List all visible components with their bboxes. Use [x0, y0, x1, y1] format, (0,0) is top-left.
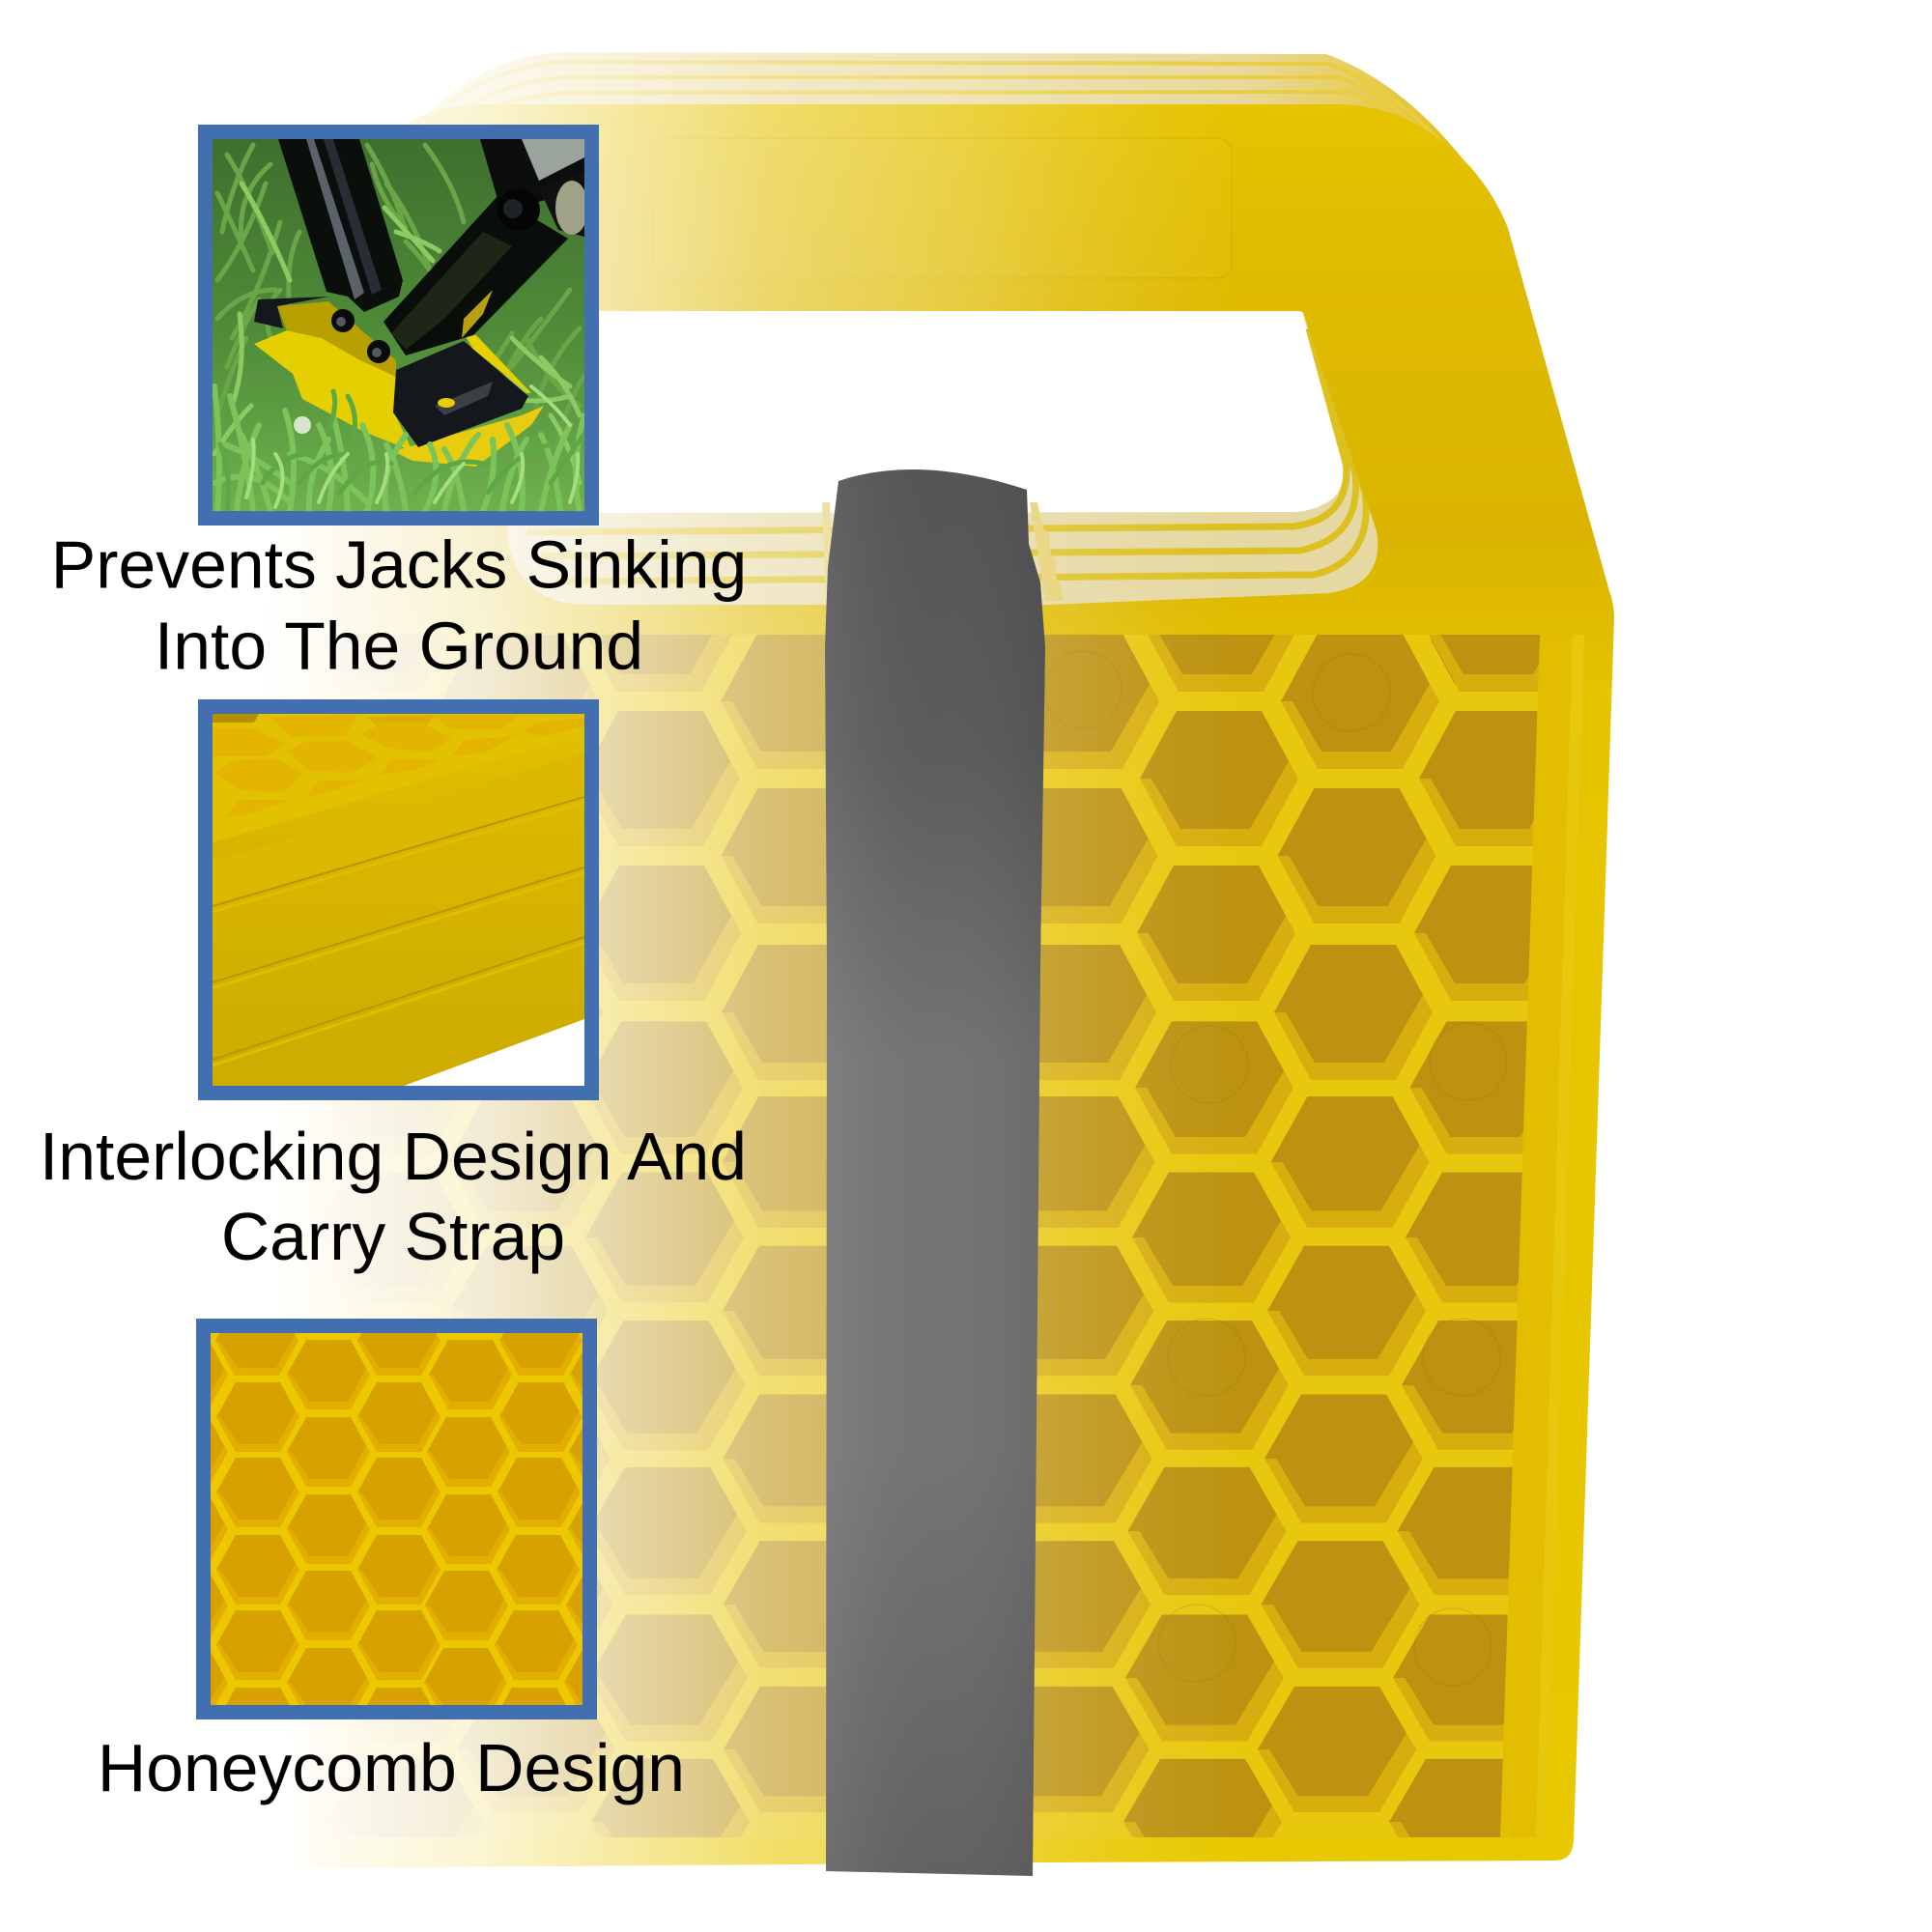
back layers along the top of the handle	[415, 52, 1462, 290]
yellow hole	[438, 398, 455, 408]
yellow block under the jack	[254, 330, 412, 451]
back layers visible through the handle opening	[483, 311, 1378, 605]
caption: interlocking design	[40, 1119, 747, 1274]
left black flange	[254, 297, 328, 328]
panel: honeycomb close-up	[196, 1319, 597, 1719]
panel: interlocking edge photo	[198, 699, 599, 1100]
side bands of the stacked blocks	[213, 794, 584, 1086]
black foot plate	[393, 341, 528, 447]
caption: interlocking design: Carry Strap	[221, 1199, 565, 1274]
caption: prevents jacks sinking	[51, 527, 747, 684]
jack right strut	[384, 196, 568, 355]
white fade over the left of the product	[193, 29, 1236, 1893]
grey carry strap	[825, 469, 1045, 1876]
front block body with handle opening	[266, 104, 1614, 1868]
handle label recess	[654, 138, 1232, 278]
grass blades behind	[217, 145, 583, 454]
top-right jack hardware	[480, 139, 584, 202]
honeycomb face	[446, 635, 1584, 1837]
honeycomb holes on the top surface	[213, 714, 584, 818]
product: stacked yellow leveling blocks	[193, 29, 1614, 1893]
strap side tabs	[822, 502, 1063, 604]
panel: jack on grass photo	[198, 125, 599, 526]
bolts	[331, 309, 355, 332]
white corner	[404, 1019, 584, 1086]
foreground grass blades	[214, 386, 584, 511]
dark yellow plate	[277, 301, 396, 377]
caption: interlocking design: Interlocking Design And	[40, 1119, 747, 1194]
jack left strut	[278, 139, 403, 312]
caption: prevents jacks sinking: Into The Ground	[155, 609, 643, 684]
caption: prevents jacks sinking: Prevents Jacks Sinking	[51, 527, 747, 603]
caption: honeycomb design: Honeycomb Design	[98, 1730, 685, 1805]
